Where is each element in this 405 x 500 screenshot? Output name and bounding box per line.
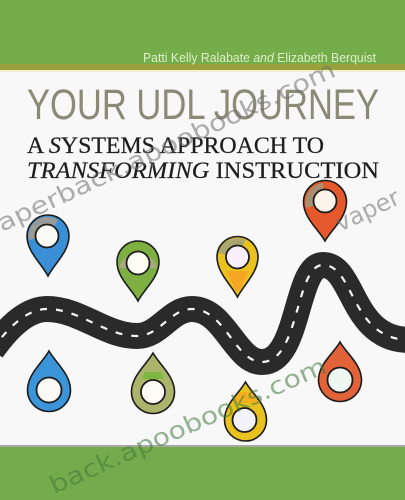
authors: Patti Kelly Ralabate and Elizabeth Berquist bbox=[143, 50, 376, 65]
pin: green bottom bbox=[132, 353, 174, 414]
top green band bbox=[0, 0, 405, 72]
pin: yellow bottom bbox=[224, 382, 266, 441]
pin: yellow top bbox=[217, 236, 258, 297]
pin: green top bbox=[117, 241, 159, 301]
watermarks: back.apoobooks.com bbox=[45, 352, 331, 499]
subtitle: A SYSTEMS APPROACH TO bbox=[27, 133, 324, 158]
pin: blue bottom bbox=[28, 351, 70, 412]
watermarks: vaper bbox=[331, 183, 404, 237]
bottom green band bbox=[0, 445, 405, 500]
pin: red bottom bbox=[318, 342, 362, 402]
pin: red top bbox=[304, 180, 346, 241]
pin: blue top bbox=[27, 215, 69, 276]
subtitle: TRANSFORMING INSTRUCTION bbox=[27, 158, 379, 183]
road bbox=[0, 265, 405, 362]
subtitle bbox=[27, 133, 379, 183]
watermarks: aperback.apoobooks.com bbox=[0, 56, 340, 237]
